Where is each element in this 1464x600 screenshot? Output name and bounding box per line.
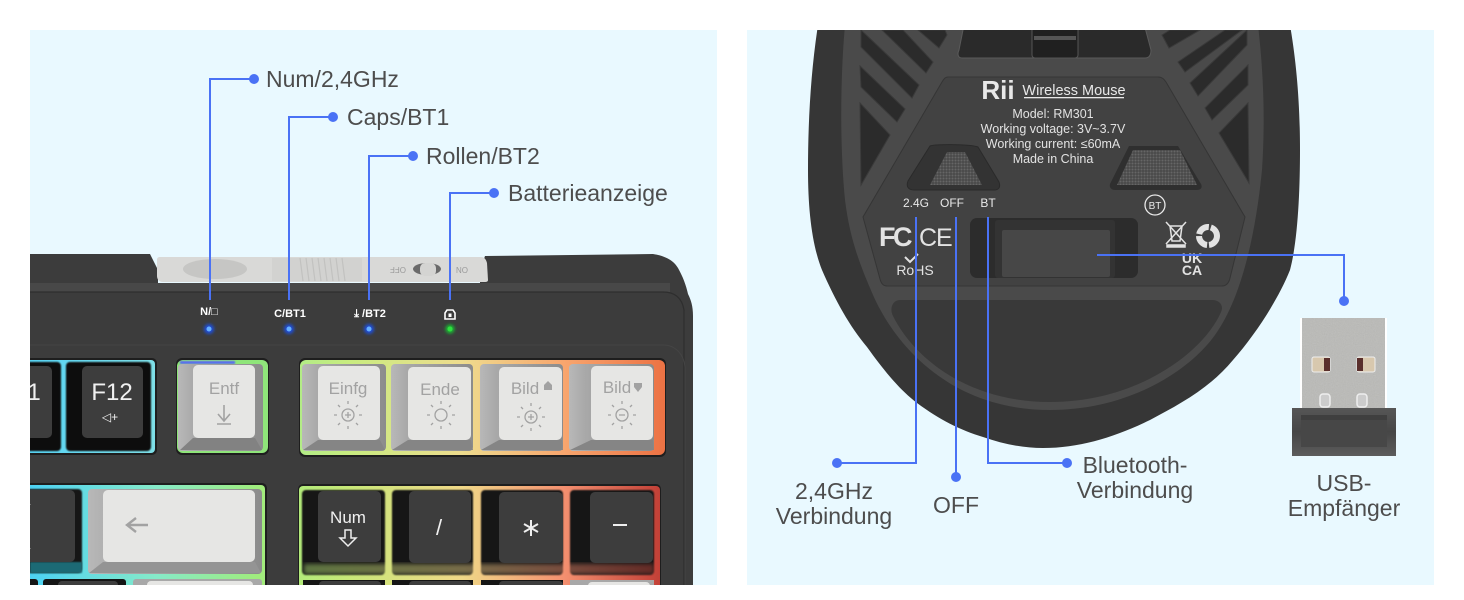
RoHS mark <box>898 253 934 275</box>
key group: F keys: ◁+ <box>102 410 118 424</box>
receiver housing <box>1292 408 1396 456</box>
keycap: Einfg: Einfg <box>329 379 367 398</box>
keycap: slash <box>409 491 471 563</box>
power switch <box>970 218 1138 278</box>
indicator: battery <box>445 310 455 334</box>
callout: Bluetooth-Verbindung: Verbindung <box>1077 477 1193 503</box>
top slider strip: OFF <box>390 265 406 274</box>
BT icon <box>1145 195 1165 215</box>
keyboard photo <box>10 254 693 596</box>
key group: row two left <box>30 483 267 585</box>
brand logo: Rii <box>981 75 1015 105</box>
callout: 2,4GHz Verbindung: 2,4GHz <box>795 478 873 504</box>
keycap: asterisk <box>499 492 563 563</box>
receiver metal plug <box>1300 318 1387 410</box>
indicator: N/lock <box>200 306 218 334</box>
specifications: Working current: ≤60mA <box>986 137 1121 151</box>
panel: keyboard background <box>30 30 717 585</box>
FC CE marks: FC <box>879 222 912 252</box>
indicator: C/BT1: C/BT1 <box>274 308 306 320</box>
top slider strip <box>157 257 488 282</box>
top slider strip: ON <box>456 265 468 274</box>
waste bin icon <box>1166 222 1186 247</box>
specifications: Working voltage: 3V~3.7V <box>981 122 1126 136</box>
switch position labels <box>904 198 996 207</box>
indicator: N/lock: N/□ <box>200 306 218 318</box>
UKCA mark: UK <box>1182 250 1202 266</box>
keycap: Bild down <box>591 366 653 440</box>
indicator: C/BT1 <box>274 308 306 334</box>
callout: Bluetooth-Verbindung: Bluetooth- <box>1083 452 1187 478</box>
top opening with scroll wheel <box>958 30 1152 58</box>
callout: 2,4GHz Verbindung <box>776 217 916 529</box>
key group: F keys <box>30 358 157 455</box>
callout: Batterieanzeige: Batterieanzeige <box>508 180 668 206</box>
indicator: scroll/BT2 <box>353 308 386 334</box>
callout: Num/2,4GHz: Num/2,4GHz <box>266 66 399 92</box>
right foot pad <box>1110 146 1202 190</box>
callout: Num/2,4GHz <box>210 66 399 300</box>
key group: F keys: F12 <box>91 379 133 406</box>
product name: Wireless Mouse <box>1022 83 1126 99</box>
callout: OFF <box>933 217 979 518</box>
keycap: Ende: Ende <box>420 380 460 399</box>
FC CE marks: E <box>936 224 953 252</box>
inner bottom shell <box>841 25 1264 410</box>
mouse photo <box>808 20 1300 448</box>
callout: OFF: OFF <box>933 492 979 518</box>
keycap: Ende <box>408 367 471 440</box>
key group: Einfg to Bild <box>299 358 666 457</box>
key group: F keys: 1 <box>27 379 41 406</box>
left foot pad <box>907 145 1000 190</box>
BT icon: BT <box>1149 201 1161 212</box>
palm rest area <box>891 300 1222 402</box>
callout: USB-Empfänger: Empfänger <box>1288 495 1401 521</box>
keyboard body <box>30 254 693 590</box>
FC CE marks: C <box>919 224 937 252</box>
callout: Rollen/BT2: Rollen/BT2 <box>426 143 540 169</box>
keycap: Bild up: Bild <box>511 379 539 398</box>
callout: Bluetooth-Verbindung <box>988 217 1193 503</box>
callout: Batterieanzeige <box>450 180 668 300</box>
panel: mouse background <box>747 30 1434 585</box>
mouse body <box>808 25 1300 448</box>
keycap: slash: / <box>436 515 443 540</box>
indicator: scroll/BT2: ⤓ /BT2 <box>353 308 386 320</box>
keycap: Num <box>318 491 381 562</box>
key group: Entf <box>176 358 269 455</box>
specifications: Model: RM301 <box>1012 107 1094 121</box>
RoHS mark: RoHS <box>896 262 934 278</box>
callout: Rollen/BT2 <box>369 143 540 300</box>
callout: USB-Empfänger: USB- <box>1317 470 1371 496</box>
switch position labels: 2.4G <box>903 196 929 210</box>
switch position labels: OFF <box>940 196 964 210</box>
key group: Entf: Entf <box>209 379 239 398</box>
switch position labels: BT <box>980 196 996 210</box>
recycle icon <box>1199 227 1217 245</box>
keycap: Bild up <box>499 367 562 440</box>
label plate <box>863 77 1245 286</box>
specifications <box>981 107 1126 166</box>
FC CE marks <box>880 227 952 246</box>
specifications: Made in China <box>1013 152 1093 166</box>
USB receiver <box>1292 318 1396 456</box>
callout: 2,4GHz Verbindung: Verbindung <box>776 503 892 529</box>
front vents <box>860 30 1249 185</box>
keycap: Num: Num <box>330 508 366 527</box>
callout: Caps/BT1 <box>289 104 449 300</box>
callout: USB-Empfänger <box>1097 255 1401 521</box>
UKCA mark <box>1182 254 1202 275</box>
callout: Caps/BT1: Caps/BT1 <box>347 104 449 130</box>
key group: numpad row <box>298 484 661 596</box>
UKCA mark: CA <box>1182 262 1202 278</box>
keycap: Bild down: Bild <box>603 378 631 397</box>
keycap: Einfg <box>318 366 380 440</box>
keycap: minus <box>590 492 653 563</box>
